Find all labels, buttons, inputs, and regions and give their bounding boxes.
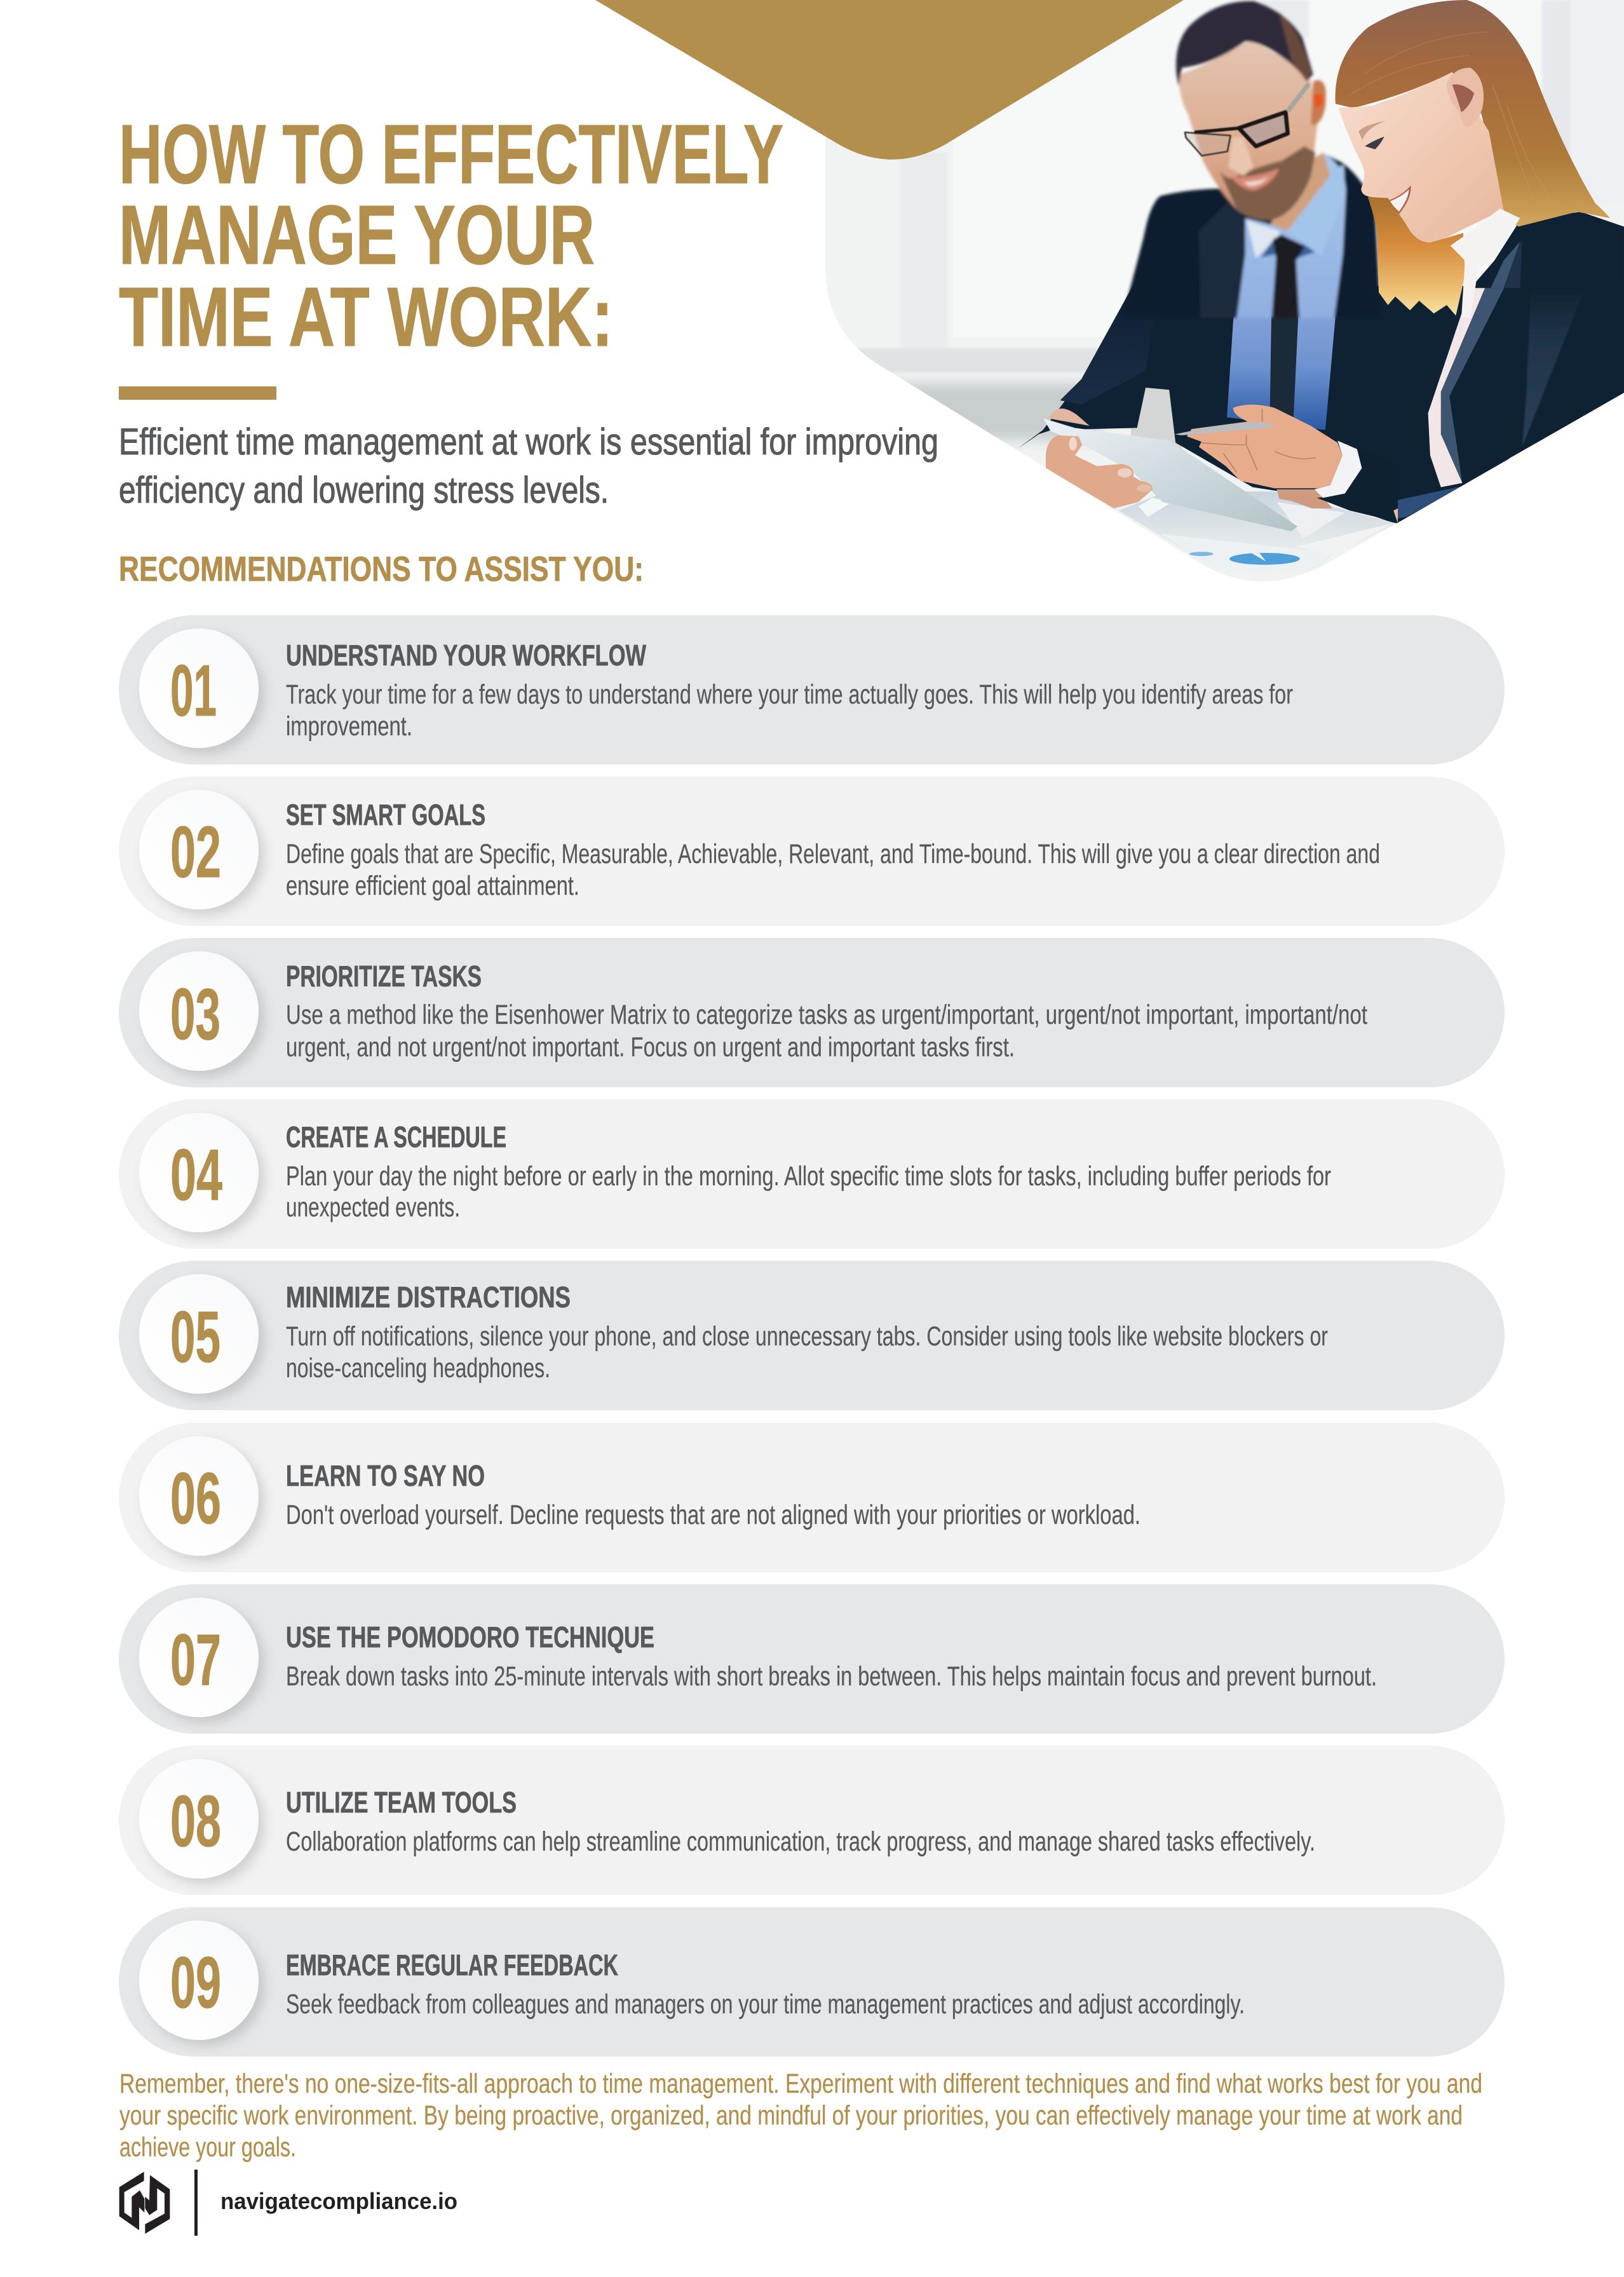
title: TIME AT WORK: xyxy=(119,270,613,364)
title: HOW TO EFFECTIVELY xyxy=(119,107,783,201)
panel: recommendation 06: 06 xyxy=(170,1458,221,1539)
panel: recommendation 01 xyxy=(119,615,1505,765)
icon: navigate compliance logo xyxy=(119,2172,170,2234)
panel: recommendation 07: USE THE POMODORO TECHNIQUE xyxy=(286,1621,654,1654)
panel: recommendation 09 xyxy=(119,1907,1505,2056)
panel: recommendation 05: 05 xyxy=(170,1297,220,1378)
section heading: RECOMMENDATIONS TO ASSIST YOU: xyxy=(119,549,644,588)
panel: recommendation 08: UTILIZE TEAM TOOLS xyxy=(286,1786,517,1819)
panel: recommendation 08: 08 xyxy=(170,1781,221,1862)
panel: recommendation 05 xyxy=(119,1261,1505,1410)
panel: recommendation 04 xyxy=(119,1099,1505,1249)
panel: recommendation 04: unexpected events. xyxy=(286,1192,460,1223)
panel: recommendation 02: SET SMART GOALS xyxy=(286,798,485,831)
panel: recommendation 02: ensure efficient goal attainment. xyxy=(286,871,579,901)
panel: recommendation 01: UNDERSTAND YOUR WORKFLOW xyxy=(286,639,646,672)
panel: recommendation 02 xyxy=(119,777,1505,926)
panel: recommendation 09: EMBRACE REGULAR FEEDBACK xyxy=(286,1948,618,1981)
panel: recommendation 07 xyxy=(119,1584,1505,1734)
panel: recommendation 08: Collaboration platforms can help streamline communication, track progress, and manage shared tasks effectively. xyxy=(286,1826,1315,1857)
panel: recommendation 01: Track your time for a few days to understand where your time actually goes. This will help you identify areas for xyxy=(286,679,1293,710)
panel: recommendation 05: MINIMIZE DISTRACTIONS xyxy=(286,1281,571,1314)
panel: recommendation 03: 03 xyxy=(170,974,220,1055)
panel: recommendation 08 xyxy=(119,1746,1505,1895)
panel: recommendation 01: 01 xyxy=(170,651,217,731)
logo divider xyxy=(194,2170,198,2236)
logo wordmark: navigatecompliance.io xyxy=(220,2188,457,2214)
panel: recommendation 03: urgent, and not urgent/not important. Focus on urgent and important tasks first. xyxy=(286,1032,1015,1063)
closing note xyxy=(119,2069,1482,2163)
panel: recommendation 06: LEARN TO SAY NO xyxy=(286,1459,485,1492)
title xyxy=(119,107,783,364)
subtitle: efficiency and lowering stress levels. xyxy=(119,470,609,511)
panel: recommendation 06 xyxy=(119,1423,1505,1572)
panel: recommendation 04: 04 xyxy=(170,1135,222,1216)
panel: recommendation 05: noise-canceling headphones. xyxy=(286,1353,550,1383)
panel: recommendation 09: Seek feedback from colleagues and managers on your time management practices and adjust accordingly. xyxy=(286,1989,1245,2020)
title underline bar xyxy=(119,386,276,400)
photo: two business people reviewing a tablet xyxy=(825,0,1624,591)
panel: recommendation 09: 09 xyxy=(170,1943,221,2023)
panel: recommendation 07: 07 xyxy=(170,1620,221,1701)
panel: recommendation 04: CREATE A SCHEDULE xyxy=(286,1120,506,1153)
subtitle xyxy=(119,421,938,511)
panel: recommendation 03 xyxy=(119,938,1505,1087)
closing note: achieve your goals. xyxy=(119,2132,296,2163)
gold chevron shape xyxy=(595,0,1184,160)
panel: recommendation 01: improvement. xyxy=(286,711,412,742)
subtitle: Efficient time management at work is essential for improving xyxy=(119,421,938,463)
panel: recommendation 03: PRIORITIZE TASKS xyxy=(286,960,482,993)
panel: recommendation 02: 02 xyxy=(170,812,221,893)
panel: recommendation 06: Don't overload yourself. Decline requests that are not aligned with your priorities or workload. xyxy=(286,1500,1140,1530)
title: MANAGE YOUR xyxy=(119,188,595,282)
